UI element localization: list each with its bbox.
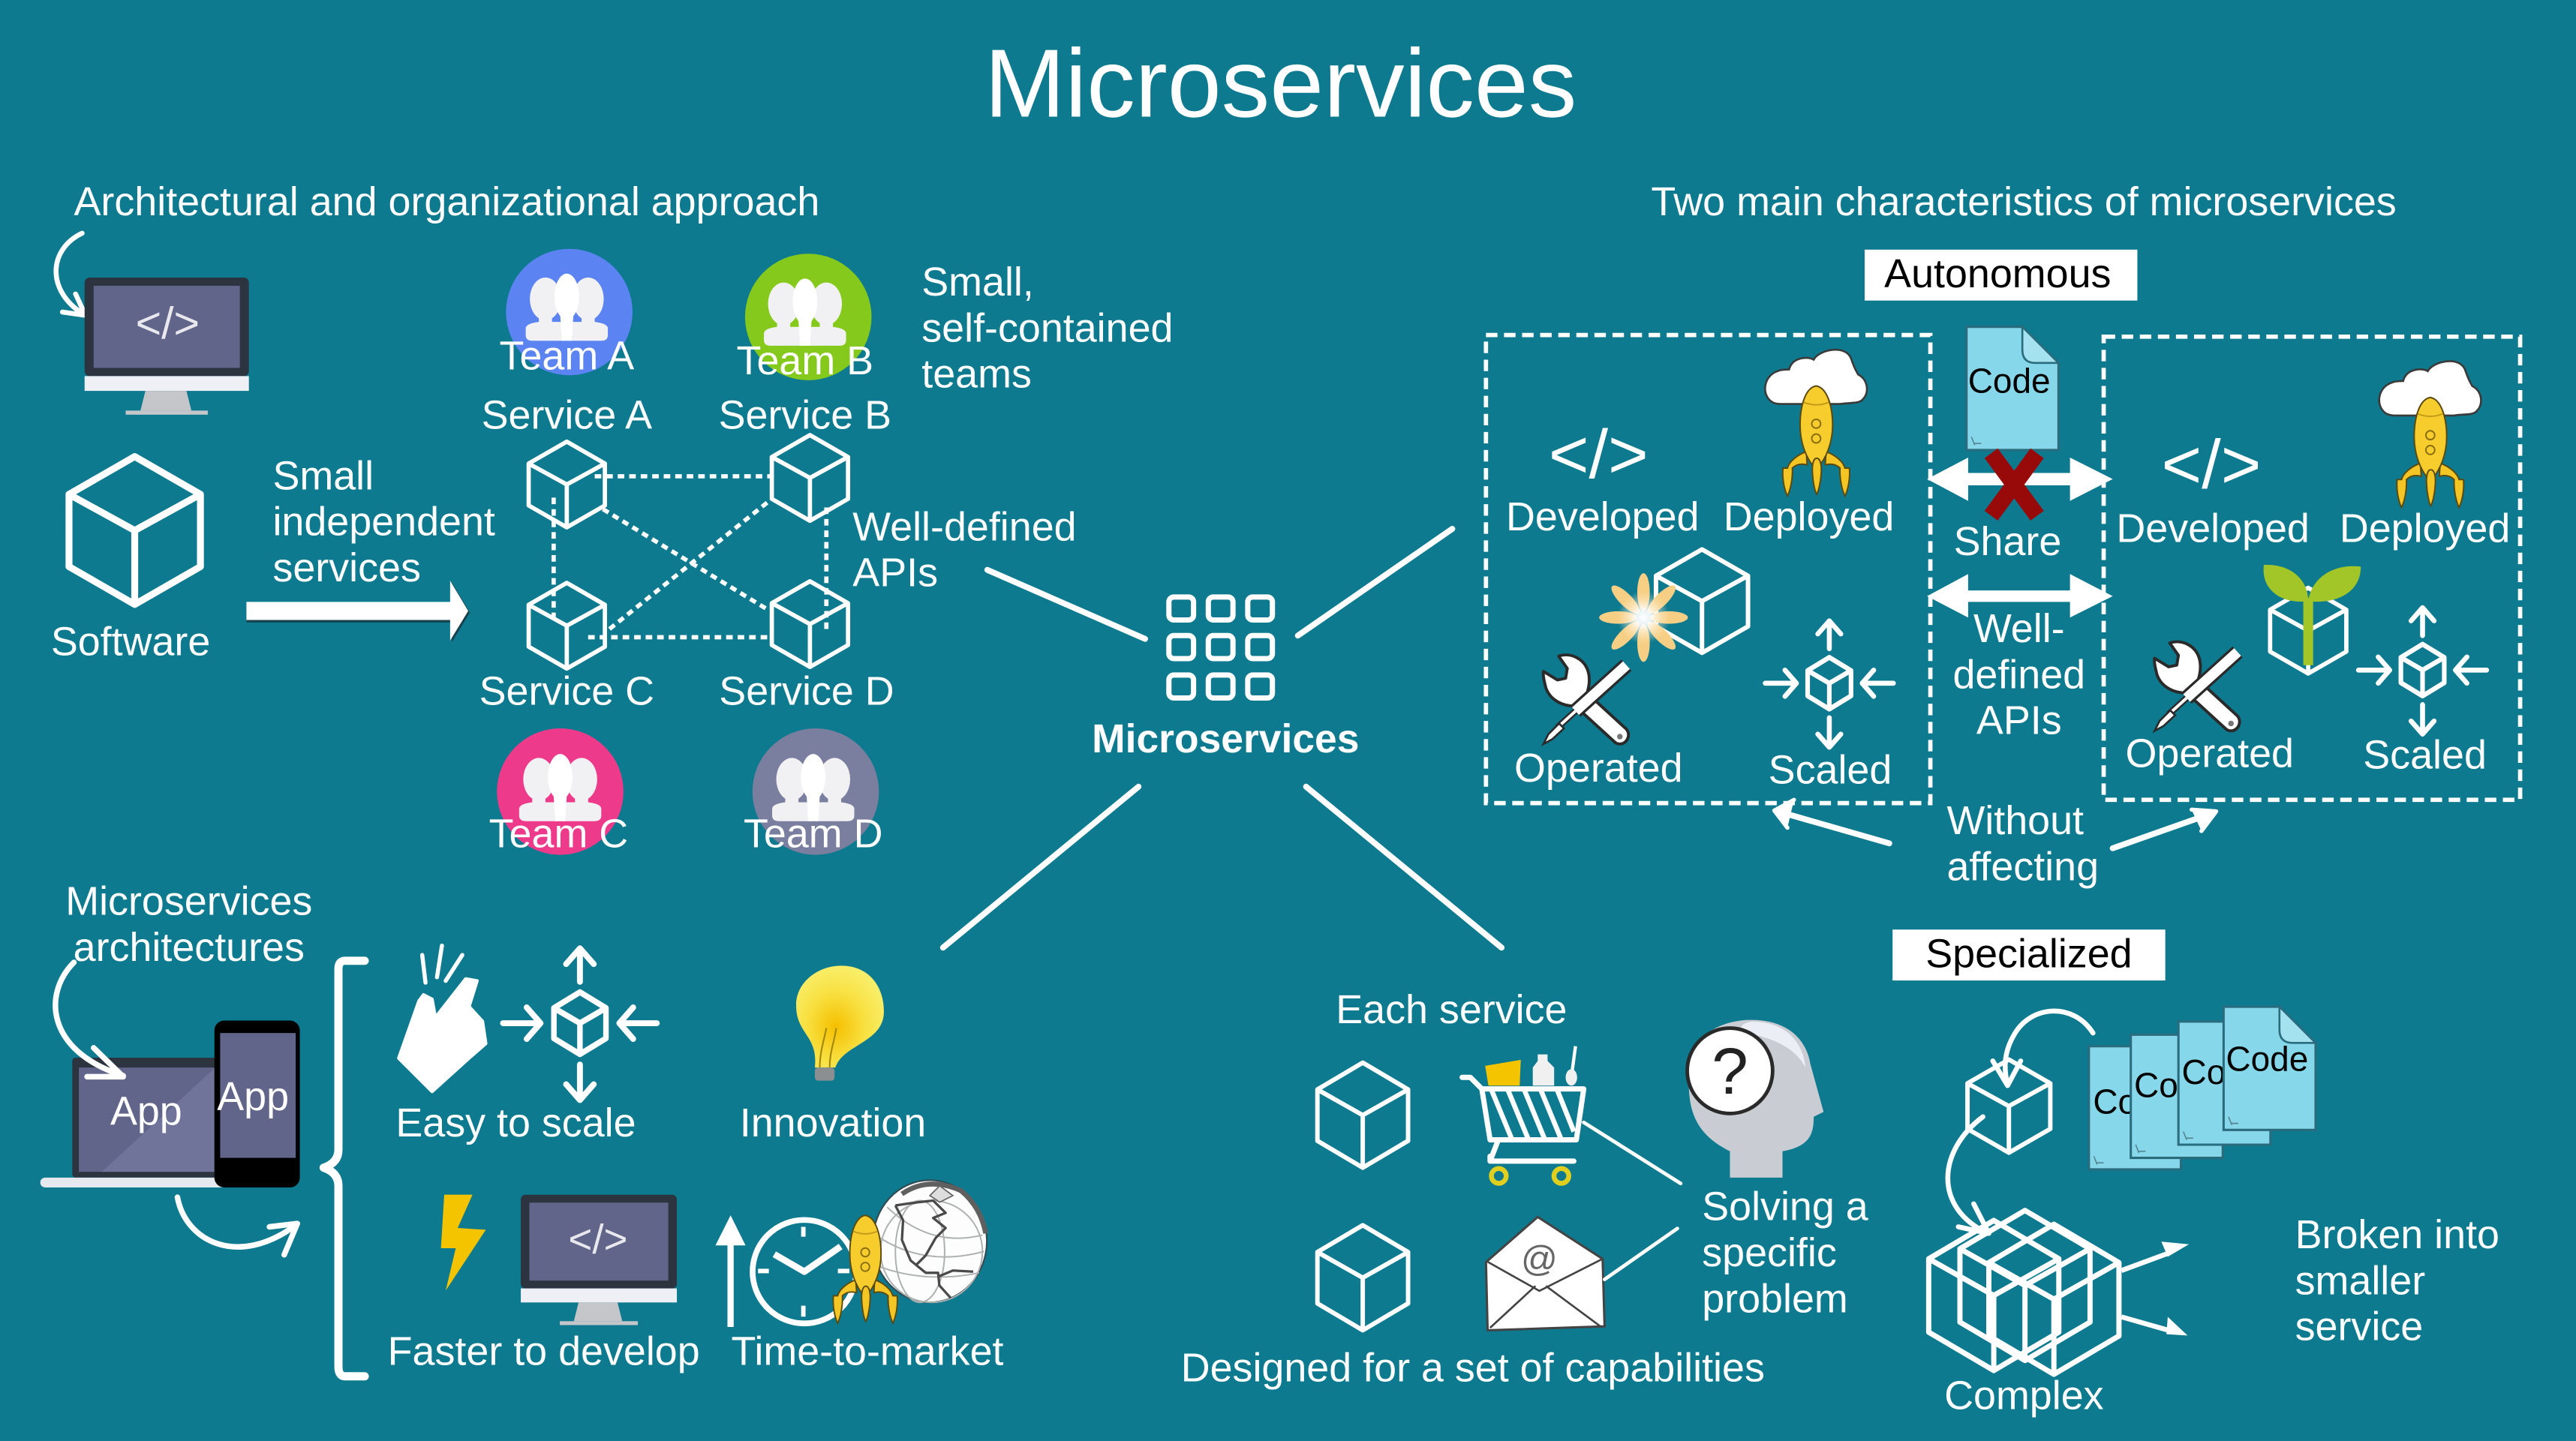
lines to problem text <box>1584 1122 1681 1280</box>
text: small independent services: services <box>272 545 421 590</box>
heading: two main characteristics: Two main characteristics of microservices <box>1651 179 2397 224</box>
icon: cloud <box>1765 350 1867 404</box>
text: microservices architectures: Microservices <box>65 879 312 924</box>
code symbol: </> <box>2161 426 2261 503</box>
service labels: Service A <box>482 392 652 437</box>
arrow: share double arrow <box>1927 458 2113 501</box>
icon: laptop <box>41 1058 241 1187</box>
label box: specialized: Specialized <box>1925 932 2133 977</box>
icon: burst <box>1599 573 1688 662</box>
icon: tools <box>1543 655 1628 744</box>
text: solving a specific problem: problem <box>1702 1276 1848 1321</box>
text: well-defined APIs: APIs <box>1976 698 2062 743</box>
text: solving a specific problem: Solving a <box>1702 1184 1868 1229</box>
service labels: Service D <box>719 668 894 713</box>
label: time-to-market: Time-to-market <box>732 1328 1004 1373</box>
icon: envelope <box>1486 1217 1604 1330</box>
label: developed: Developed <box>2116 506 2310 551</box>
arrow: cube to complex <box>1948 1117 1989 1233</box>
title: Microservices <box>984 29 1577 137</box>
service labels: Service C <box>479 668 654 713</box>
label: deployed: Deployed <box>2340 506 2510 551</box>
icon: phone: App <box>217 1074 289 1119</box>
label: scaled: Scaled <box>2363 733 2487 778</box>
text: without affecting: Without <box>1946 798 2084 843</box>
text: small self-contained teams: teams <box>921 352 1032 397</box>
icon: code document: Code <box>1968 361 2051 400</box>
icon: stacked code documents: Code <box>2182 1052 2264 1091</box>
icon: tools <box>2154 642 2240 731</box>
icon: complex cube cluster <box>1928 1211 2119 1374</box>
team D: Team D <box>744 812 883 857</box>
team A <box>500 249 634 379</box>
label: complex: Complex <box>1944 1373 2104 1418</box>
label: easy to scale: Easy to scale <box>395 1100 636 1145</box>
code symbol: </> <box>1549 416 1649 493</box>
text: well-defined APIs: defined <box>1952 652 2085 697</box>
icon: rocket <box>1783 386 1850 496</box>
label: developed: Developed <box>1506 494 1699 539</box>
icon: phone <box>215 1021 300 1187</box>
icon: lightning <box>441 1195 485 1290</box>
text: small self-contained teams: self-contained <box>921 305 1174 350</box>
team D <box>744 728 883 857</box>
text: well-defined APIs: Well- <box>1973 606 2065 651</box>
icon: scale large <box>503 948 657 1100</box>
icon: tapping hand <box>398 946 485 1091</box>
service labels <box>479 392 894 713</box>
panel: right service box <box>2104 337 2520 800</box>
icon: globe <box>873 1180 987 1302</box>
text: solving a specific problem: specific <box>1702 1230 1837 1275</box>
icon: monitor small <box>521 1195 677 1325</box>
text: broken into smaller service: Broken into <box>2295 1212 2499 1257</box>
icon: stacked code documents: Code <box>2093 1082 2175 1121</box>
icon: microservices grid <box>1169 597 1273 698</box>
arrow: API double arrow <box>1927 574 2113 617</box>
icon: envelope: @ <box>1521 1239 1558 1280</box>
text: broken into smaller service: smaller <box>2295 1258 2425 1303</box>
connector lines from hub <box>943 529 1501 947</box>
icon: software cube <box>69 457 200 605</box>
icon: rocket <box>2397 398 2463 508</box>
panel: left service box <box>1486 335 1931 803</box>
text: microservices architectures: architectures <box>74 925 305 970</box>
icon: curved arrow to monitor <box>56 233 86 315</box>
arrow: docs to cube <box>1993 1011 2093 1085</box>
text: without affecting: affecting <box>1946 845 2099 890</box>
icon: scale <box>1766 621 1893 747</box>
icon: head with question: ? <box>1712 1034 1748 1108</box>
label: innovation: Innovation <box>740 1100 926 1145</box>
text: broken into smaller service: service <box>2295 1304 2423 1349</box>
icon: cube <box>1656 549 1748 653</box>
icon: clock <box>753 1220 856 1323</box>
team C: Team C <box>489 812 628 857</box>
text: well-defined APIs: Well-defined <box>852 504 1077 549</box>
icon: shopping cart <box>1462 1046 1584 1183</box>
text: well-defined APIs: APIs <box>852 551 938 596</box>
icon: up arrow <box>715 1215 746 1327</box>
heading: architectural approach: Architectural and organizational approach <box>74 179 819 224</box>
arrow: software to services <box>246 581 470 642</box>
team B <box>737 254 873 383</box>
team B: Team B <box>737 338 873 383</box>
icon: cube two <box>1318 1225 1408 1330</box>
icon: cube with sprout <box>2264 565 2361 674</box>
icon: monitor <box>85 278 249 415</box>
label: microservices hub: Microservices <box>1092 717 1359 761</box>
label: faster to develop: Faster to develop <box>388 1328 700 1373</box>
icon: stacked code documents: Code <box>2226 1040 2308 1079</box>
arrow: curved to laptop <box>56 962 123 1076</box>
icon: monitor: </> <box>136 298 200 348</box>
icon: laptop: App <box>110 1089 182 1134</box>
label: operated: Operated <box>1514 746 1683 791</box>
icon: head with question <box>1688 1020 1823 1178</box>
icon: red cross <box>1991 453 2037 515</box>
text: small independent services: independent <box>272 500 495 545</box>
icon: stacked code documents: Code <box>2134 1066 2217 1105</box>
label: each service: Each service <box>1336 987 1567 1032</box>
text: small self-contained teams: Small, <box>921 260 1034 305</box>
icon: small cube <box>1967 1060 2050 1153</box>
label: designed for capabilities: Designed for a set of capabilities <box>1181 1345 1765 1390</box>
label: deployed: Deployed <box>1724 494 1894 539</box>
icon: monitor small: </> <box>568 1216 628 1262</box>
label: operated: Operated <box>2126 731 2294 776</box>
icon: stacked code documents <box>2089 1007 2316 1169</box>
service network with dashed API links <box>529 435 848 668</box>
arrow: curved to benefits <box>177 1197 297 1255</box>
brace <box>323 961 365 1376</box>
team A: Team A <box>500 334 634 379</box>
label box: autonomous: Autonomous <box>1884 251 2111 296</box>
icon: light bulb <box>796 965 884 1081</box>
arrow: to left box <box>1775 800 1889 843</box>
icon: rocket <box>833 1215 897 1323</box>
label: software: Software <box>51 620 210 665</box>
icon: code document <box>1967 327 2058 450</box>
arrow: to right box <box>2113 809 2217 848</box>
icon: cube one <box>1318 1063 1408 1168</box>
service labels: Service B <box>719 392 891 437</box>
icon: scale <box>2358 608 2487 734</box>
arrows: broken out <box>2121 1241 2189 1335</box>
label: share: Share <box>1954 519 2061 564</box>
team C <box>489 728 628 857</box>
text: small independent services: Small <box>272 453 374 498</box>
label: scaled: Scaled <box>1769 747 1892 792</box>
icon: cloud <box>2379 361 2481 416</box>
label box: specialized <box>1892 929 2166 980</box>
